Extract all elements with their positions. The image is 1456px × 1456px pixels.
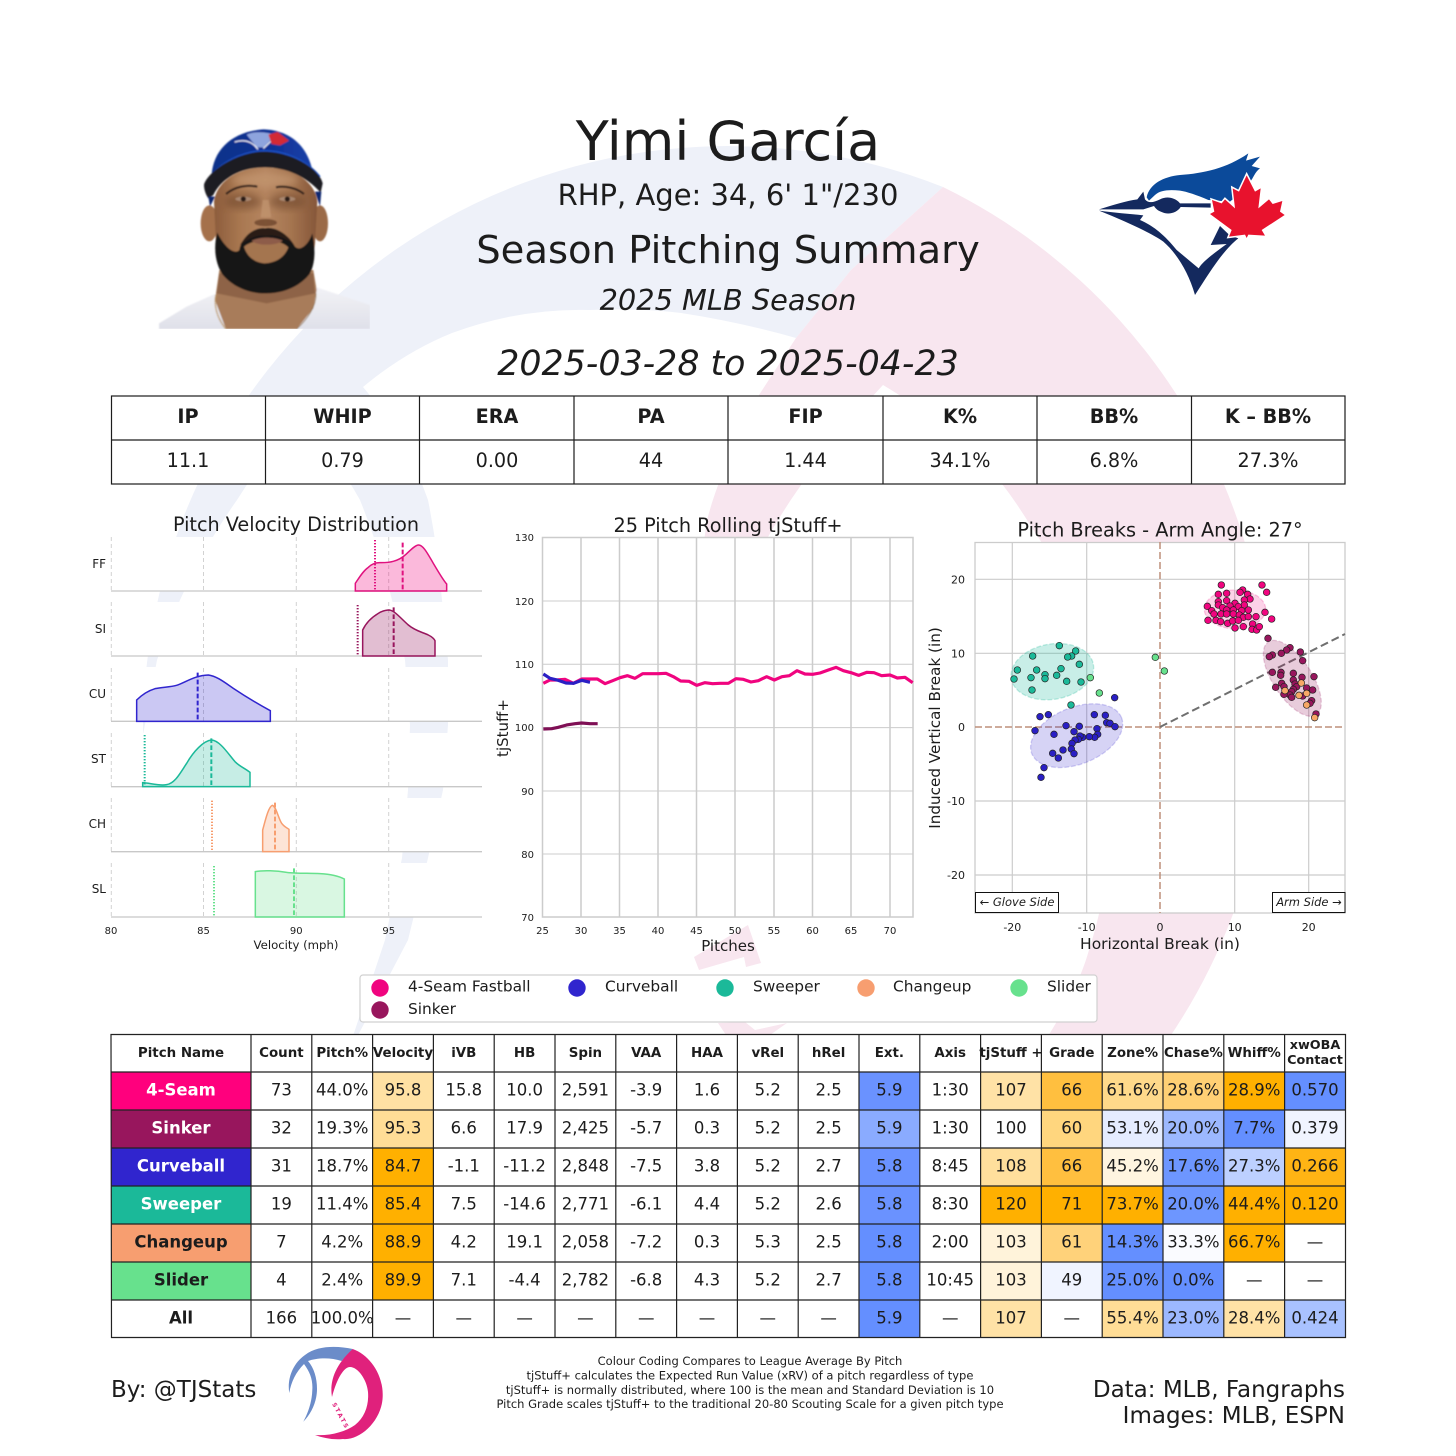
row: Slider: 10:45 (926, 1270, 974, 1290)
row: Changeup: 14.3% (1106, 1232, 1159, 1252)
row: Slider: -4.4 (508, 1270, 541, 1290)
glove side label: ← Glove Side (980, 895, 1054, 909)
row: Slider: 49 (1061, 1270, 1082, 1290)
row: 4-Seam: 73 (271, 1080, 292, 1100)
row: Changeup: 7 (276, 1232, 287, 1252)
row: Changeup: 2,058 (562, 1232, 609, 1252)
row: Sinker: 2.5 (815, 1118, 842, 1138)
rolling y axis ticks (515, 533, 534, 924)
table header row: Ext. (875, 1046, 904, 1061)
stats header row: FIP (788, 405, 823, 428)
row: Changeup: — (1307, 1232, 1323, 1252)
SL density (214, 866, 344, 917)
table header row: tjStuff + (979, 1046, 1043, 1061)
row: All: — (456, 1308, 472, 1328)
row: 4-Seam: -3.9 (630, 1080, 662, 1100)
row: Changeup: 88.9 (385, 1232, 421, 1252)
chart title: velocity: Pitch Velocity Distribution (173, 513, 419, 536)
row: Curveball: 2.7 (815, 1156, 842, 1176)
row: Slider: 4 (276, 1270, 287, 1290)
row: Curveball (111, 1148, 1345, 1186)
legend: Slider (1047, 978, 1092, 996)
row: Sinker: 0.3 (694, 1118, 720, 1138)
row: Sinker: 5.2 (755, 1118, 781, 1138)
row: Curveball: 5.2 (755, 1156, 781, 1176)
row: All: — (942, 1308, 958, 1328)
row: Sinker: 60 (1061, 1118, 1082, 1138)
rolling x axis label: Pitches (701, 937, 755, 955)
row: Sweeper: 73.7% (1106, 1194, 1159, 1214)
row: 4-Seam: 4-Seam (146, 1080, 216, 1100)
rolling x axis ticks: 25 (536, 926, 549, 937)
row: All: 0.424 (1291, 1308, 1339, 1328)
row: Curveball: -11.2 (503, 1156, 546, 1176)
row: Slider: — (1307, 1270, 1323, 1290)
table header row: Pitch Name (138, 1046, 224, 1061)
breaks y axis ticks: 0 (958, 721, 965, 734)
row: All: — (1064, 1308, 1080, 1328)
team logo: blue jay (1099, 153, 1285, 295)
stats header row: ERA (476, 405, 519, 428)
velocity x axis ticks (105, 926, 395, 937)
stats header row: K% (943, 405, 977, 428)
arm side label (1272, 892, 1345, 912)
row: Curveball: 3.8 (694, 1156, 720, 1176)
curveball dots (1032, 694, 1118, 781)
rolling y axis label: tjStuff+ (494, 699, 512, 757)
row: Slider: 25.0% (1106, 1270, 1159, 1290)
row: Slider: 5.8 (876, 1270, 903, 1290)
rolling y axis ticks: 70 (521, 913, 534, 924)
row: All: — (820, 1308, 837, 1328)
legend (360, 975, 1097, 1022)
footnotes: tjStuff+ is normally distributed, where 100 is the mean and Standard Deviation is 10 (506, 1383, 994, 1397)
row: Sinker: 2,425 (562, 1118, 609, 1138)
table header row: Count (259, 1046, 304, 1061)
row: Sweeper: 85.4 (385, 1194, 421, 1214)
table header row: vRel (751, 1046, 784, 1061)
row: All: — (638, 1308, 654, 1328)
row labels: CU (89, 687, 106, 701)
row: All: — (760, 1308, 776, 1328)
row: Curveball: 84.7 (385, 1156, 421, 1176)
rolling y axis ticks: 80 (521, 850, 534, 861)
row: Slider: 89.9 (385, 1270, 421, 1290)
SI density (358, 605, 435, 656)
row labels: SI (95, 622, 106, 636)
row: 4-Seam: 5.9 (876, 1080, 903, 1100)
row: 4-Seam: 2,591 (562, 1080, 609, 1100)
row: Sinker: 1:30 (932, 1118, 969, 1138)
breaks y axis ticks: -10 (947, 795, 965, 808)
footnotes: tjStuff+ calculates the Expected Run Value (xRV) of a pitch regardless of type (527, 1368, 973, 1382)
breaks y axis ticks (947, 574, 965, 882)
table header row: VAA (631, 1046, 662, 1061)
breaks y axis ticks: 20 (951, 574, 965, 586)
row: All: 107 (995, 1308, 1027, 1328)
breaks x axis ticks: -10 (1078, 921, 1096, 934)
legend: Changeup (893, 978, 971, 996)
row: Sinker: 19.3% (316, 1118, 368, 1138)
table header row: Whiff% (1228, 1046, 1281, 1061)
player headshot (159, 129, 370, 329)
row: Changeup: 19.1 (506, 1232, 543, 1252)
row labels: ST (91, 752, 107, 766)
row: Curveball: Curveball (137, 1156, 225, 1176)
row: 4-Seam: 2.5 (815, 1080, 842, 1100)
FF density (355, 540, 447, 591)
row: 4-Seam: 1:30 (932, 1080, 969, 1100)
rolling tjStuff+ line chart (494, 533, 913, 955)
glove side label (976, 892, 1058, 912)
row: 4-Seam: 107 (995, 1080, 1027, 1100)
rolling x axis ticks: 50 (729, 926, 741, 937)
row: Sinker: 95.3 (385, 1118, 421, 1138)
TJStats logo (289, 1347, 383, 1439)
row: All: 5.9 (876, 1308, 903, 1328)
table header row: Zone% (1107, 1046, 1158, 1061)
row: Sinker: 6.6 (451, 1118, 477, 1138)
breaks x axis ticks: -20 (1003, 921, 1021, 934)
stats value row: 44 (639, 449, 663, 472)
row: Slider: 4.3 (694, 1270, 720, 1290)
row: Sinker (111, 1110, 1345, 1148)
row: 4-Seam: 44.0% (316, 1080, 368, 1100)
stats header row: BB% (1090, 405, 1138, 428)
breaks x axis ticks: 20 (1302, 921, 1316, 934)
row: Sinker: 32 (271, 1118, 292, 1138)
break ellipses (1006, 590, 1333, 780)
rolling y axis ticks: 90 (521, 787, 534, 798)
stats header row (177, 405, 1311, 428)
row: Changeup: 5.8 (876, 1232, 903, 1252)
pitch breaks scatter plot (926, 542, 1345, 953)
table header row: Grade (1049, 1046, 1094, 1061)
velocity x axis label: Velocity (mph) (254, 938, 338, 952)
CH density (212, 801, 289, 852)
subtitle: season: 2025 MLB Season (600, 283, 856, 317)
row: Curveball: 17.6% (1167, 1156, 1220, 1176)
season stats table (111, 396, 1345, 484)
row: Changeup: 0.3 (694, 1232, 720, 1252)
row: Curveball: 66 (1061, 1156, 1082, 1176)
stats header row: K – BB% (1225, 405, 1311, 428)
row: Sweeper: 2,771 (562, 1194, 609, 1214)
title: player name: Yimi García (575, 110, 880, 173)
pitch metrics table (111, 1034, 1346, 1338)
row: 4-Seam: 66 (1061, 1080, 1082, 1100)
row: Sweeper: -6.1 (630, 1194, 662, 1214)
breaks y axis label: Induced Vertical Break (in) (926, 627, 944, 829)
velocity x axis ticks: 95 (382, 926, 395, 937)
table header row: hRel (812, 1046, 845, 1061)
table header row: Velocity (373, 1046, 433, 1061)
row: Changeup: 2:00 (932, 1232, 969, 1252)
row: Sweeper: Sweeper (141, 1194, 222, 1214)
row: Curveball: -7.5 (630, 1156, 662, 1176)
table header row: HAA (691, 1046, 724, 1061)
velocity x axis ticks: 80 (105, 926, 117, 937)
row: Sinker: 53.1% (1106, 1118, 1159, 1138)
row: Slider: 2.7 (815, 1270, 842, 1290)
credit: author: By: @TJStats (111, 1377, 256, 1403)
row: Sweeper: 0.120 (1291, 1194, 1339, 1214)
row: 4-Seam: 10.0 (506, 1080, 543, 1100)
row: Sweeper: 8:30 (932, 1194, 969, 1214)
row: Sweeper: 4.4 (694, 1194, 720, 1214)
rolling y axis ticks: 100 (515, 723, 534, 734)
row: Changeup: 61 (1061, 1232, 1082, 1252)
row: All: 23.0% (1167, 1308, 1220, 1328)
velocity x axis ticks: 85 (197, 926, 210, 937)
row: Slider: 0.0% (1172, 1270, 1214, 1290)
row: Curveball: 31 (271, 1156, 292, 1176)
background watermark logo (143, 146, 1270, 1294)
4-seam line (543, 667, 913, 685)
row: Sweeper: 19 (271, 1194, 292, 1214)
date range: 2025-03-28 to 2025-04-23 (497, 344, 959, 384)
stats value row: 6.8% (1090, 449, 1138, 472)
stats header row: WHIP (313, 405, 372, 428)
row: Sweeper: 2.6 (815, 1194, 842, 1214)
breaks x axis ticks: 0 (1156, 921, 1164, 934)
row: Changeup: 2.5 (815, 1232, 842, 1252)
rolling x axis ticks: 55 (768, 926, 780, 937)
rolling x axis ticks: 45 (690, 926, 703, 937)
row: Changeup: Changeup (134, 1232, 228, 1252)
row: Sinker: 17.9 (506, 1118, 543, 1138)
row: Sweeper: 5.2 (755, 1194, 781, 1214)
row: 4-Seam (111, 1072, 1345, 1110)
table header row: Axis (934, 1046, 966, 1061)
sinker line (543, 723, 598, 729)
row: All: 55.4% (1106, 1308, 1159, 1328)
rolling x axis ticks: 70 (884, 926, 896, 937)
rolling x axis ticks: 60 (806, 926, 819, 937)
row: Slider: 7.1 (451, 1270, 477, 1290)
table header row: Pitch% (316, 1046, 368, 1061)
legend: Curveball (605, 978, 678, 996)
row: 4-Seam: 61.6% (1106, 1080, 1159, 1100)
rolling y axis ticks: 120 (515, 597, 534, 608)
sinker dots (1265, 635, 1319, 717)
legend: Sweeper (753, 978, 821, 996)
row: Changeup: 66.7% (1228, 1232, 1280, 1252)
row: Sweeper: -14.6 (503, 1194, 546, 1214)
row: Sinker: 5.9 (876, 1118, 903, 1138)
table header row: iVB (451, 1046, 476, 1061)
row: Slider: -6.8 (630, 1270, 662, 1290)
row: All: 100.0% (311, 1308, 374, 1328)
rolling x axis ticks: 35 (613, 926, 626, 937)
breaks x axis ticks: 10 (1228, 921, 1242, 934)
stats value row: 0.79 (321, 449, 364, 472)
rolling y axis ticks: 110 (515, 660, 534, 671)
chart title: pitch breaks: Pitch Breaks - Arm Angle: 27° (1017, 518, 1303, 542)
rolling y axis ticks: 130 (515, 533, 534, 544)
row: All: — (699, 1308, 715, 1328)
row: All: — (516, 1308, 533, 1328)
table header row: Chase% (1164, 1046, 1223, 1061)
stats value row (167, 449, 1298, 472)
row: Sweeper: 7.5 (451, 1194, 477, 1214)
legend: Sinker (408, 1000, 457, 1018)
row: Slider (111, 1262, 1323, 1300)
velocity x axis ticks: 90 (290, 926, 303, 937)
row: 4-Seam: 5.2 (755, 1080, 781, 1100)
row: Sweeper: 71 (1061, 1194, 1082, 1214)
row: 4-Seam: 28.9% (1228, 1080, 1280, 1100)
row: Changeup: 103 (995, 1232, 1027, 1252)
row: Changeup: 5.3 (755, 1232, 781, 1252)
breaks y axis ticks: 10 (951, 648, 965, 660)
stats value row: 1.44 (784, 449, 827, 472)
row: Sinker: -5.7 (630, 1118, 662, 1138)
row: Slider: Slider (154, 1270, 209, 1290)
table header row: xwOBA (1290, 1038, 1340, 1053)
row labels (89, 557, 107, 896)
row: Sinker: Sinker (151, 1118, 211, 1138)
row: Sweeper: 11.4% (316, 1194, 368, 1214)
ST density (143, 735, 250, 787)
row: 4-Seam: 1.6 (694, 1080, 720, 1100)
row: Sweeper: 44.4% (1228, 1194, 1280, 1214)
row: All (169, 1300, 1345, 1338)
row: Slider: 5.2 (755, 1270, 781, 1290)
table header row: HB (514, 1046, 535, 1061)
velocity distribution ridgeline chart (89, 537, 482, 952)
CU density (137, 673, 270, 721)
row: 4-Seam: 28.6% (1167, 1080, 1220, 1100)
rolling x axis ticks: 65 (845, 926, 857, 937)
row: Slider: 2,782 (562, 1270, 609, 1290)
table header row (138, 1038, 1343, 1068)
row: 4-Seam: 15.8 (445, 1080, 482, 1100)
footnotes (496, 1354, 1004, 1411)
row: All: — (395, 1308, 411, 1328)
stats value row: 11.1 (167, 449, 209, 472)
stats value row: 0.00 (476, 449, 518, 472)
rolling x axis ticks (536, 926, 896, 937)
row: Sweeper (111, 1186, 1345, 1224)
credit: data sources (1093, 1377, 1345, 1429)
row: Curveball: 8:45 (932, 1156, 969, 1176)
row: Curveball: 5.8 (876, 1156, 903, 1176)
stats value row: 34.1% (930, 449, 990, 472)
credit: data sources: Images: MLB, ESPN (1123, 1403, 1345, 1429)
row: Curveball: 0.266 (1291, 1156, 1339, 1176)
row: Slider: 2.4% (321, 1270, 363, 1290)
row: 4-Seam: 0.570 (1291, 1080, 1339, 1100)
row labels: FF (92, 557, 106, 571)
row: Changeup: 4.2% (321, 1232, 363, 1252)
row: All: 166 (266, 1308, 297, 1328)
slider dots (1087, 654, 1168, 696)
row: Sinker: 0.379 (1291, 1118, 1339, 1138)
row: All: All (169, 1308, 193, 1328)
footnotes: Pitch Grade scales tjStuff+ to the traditional 20-80 Scouting Scale for a given pitch type (496, 1397, 1004, 1411)
breaks y axis ticks: -20 (947, 869, 965, 882)
row: Curveball: 18.7% (316, 1156, 368, 1176)
row: Slider: 103 (995, 1270, 1027, 1290)
arm side label: Arm Side → (1275, 895, 1342, 909)
row: Curveball: 108 (995, 1156, 1027, 1176)
row: Changeup: -7.2 (630, 1232, 662, 1252)
changeup dots (1282, 680, 1318, 721)
stats value row: 27.3% (1238, 449, 1298, 472)
row: Sweeper: 120 (995, 1194, 1027, 1214)
row: All: 28.4% (1228, 1308, 1280, 1328)
chart title: rolling tjStuff+: 25 Pitch Rolling tjStuff+ (613, 514, 843, 537)
rolling x axis ticks: 40 (652, 926, 664, 937)
row: Changeup (111, 1224, 1323, 1262)
curveball line (543, 674, 590, 683)
row: Changeup: 4.2 (451, 1232, 477, 1252)
player bio line: RHP, Age: 34, 6' 1"/230 (558, 178, 898, 212)
row: 4-Seam: 95.8 (385, 1080, 421, 1100)
row: Curveball: -1.1 (448, 1156, 480, 1176)
credit: data sources: Data: MLB, Fangraphs (1093, 1377, 1345, 1403)
breaks x axis ticks (1003, 921, 1316, 934)
row: Sweeper: 5.8 (876, 1194, 903, 1214)
row: Sinker: 100 (995, 1118, 1027, 1138)
stats header row: IP (177, 405, 199, 428)
legend: 4-Seam Fastball (408, 978, 531, 996)
row: Curveball: 27.3% (1228, 1156, 1280, 1176)
row: Changeup: 33.3% (1167, 1232, 1220, 1252)
row: All: — (577, 1308, 594, 1328)
row: Sweeper: 20.0% (1167, 1194, 1220, 1214)
heading: season pitching summary: Season Pitching Summary (476, 228, 980, 273)
row: Curveball: 2,848 (562, 1156, 609, 1176)
row: Slider: — (1246, 1270, 1262, 1290)
row labels: SL (92, 882, 106, 896)
footnotes: Colour Coding Compares to League Average By Pitch (598, 1354, 902, 1368)
row: Curveball: 45.2% (1106, 1156, 1159, 1176)
sweeper dots (1011, 642, 1084, 708)
row labels: CH (89, 817, 106, 831)
table header row: Spin (569, 1046, 602, 1061)
rolling x axis ticks: 30 (575, 926, 587, 937)
row: Sinker: 20.0% (1167, 1118, 1220, 1138)
TJStats logo: STATS (330, 1402, 350, 1431)
4-seam dots (1204, 582, 1275, 633)
stats header row: PA (637, 405, 665, 428)
breaks x axis label: Horizontal Break (in) (1080, 935, 1240, 953)
row: Sinker: 7.7% (1233, 1118, 1275, 1138)
table header row: Contact (1287, 1053, 1343, 1068)
